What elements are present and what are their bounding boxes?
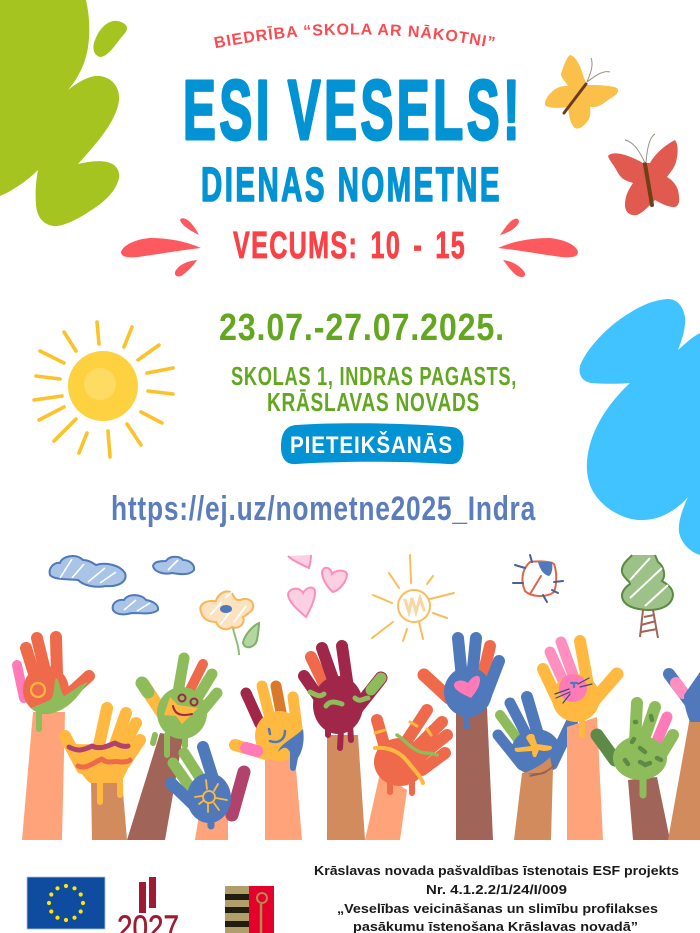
project description: „Veselības veicināšanas un slimību profilakses	[337, 901, 658, 916]
age label: VECUMS: 10 - 15	[233, 225, 466, 267]
doodle: child sun	[372, 555, 454, 641]
address	[231, 361, 517, 417]
address: KRĀSLAVAS NOVADS	[267, 387, 480, 417]
hand: yellow smiling	[235, 686, 304, 840]
project description: Krāslavas novada pašvaldības īstenotais ESF projekts	[314, 863, 679, 878]
hand: green with spots	[597, 703, 673, 840]
hand: orange with pink finger	[17, 637, 89, 840]
icon: yellow butterfly	[545, 55, 618, 129]
hand: blue with sun	[171, 747, 244, 840]
icon: watercolour sun	[34, 322, 173, 457]
registration button	[281, 423, 464, 464]
registration link: https://ej.uz/nometne2025_Indra	[111, 490, 536, 528]
hand: brown arm with green paint	[127, 658, 217, 840]
hand: yellow with wavy stripes	[65, 708, 140, 840]
dates: 23.07.-27.07.2025.	[219, 307, 505, 349]
doodle: hearts	[288, 555, 347, 617]
hand: blue at right edge	[668, 672, 700, 840]
EU stars	[47, 884, 85, 922]
doodle: ladybug	[513, 555, 563, 602]
green paint blob top left	[0, 0, 127, 226]
hand: maroon with green paint	[304, 646, 381, 840]
registration button: PIETEIKŠANĀS	[290, 431, 453, 459]
hand: yellow with bunny	[543, 641, 617, 840]
left splash decoration	[121, 218, 201, 276]
EU flag logo	[27, 877, 105, 929]
Latvia 2027 logo	[117, 877, 179, 933]
doodle: clouds	[50, 556, 194, 614]
hand: orange with stripes	[365, 710, 447, 840]
doodle: flower	[200, 591, 259, 655]
project description: Nr. 4.1.2.2/1/24/I/009	[426, 882, 567, 897]
organisation heading: BIEDRĪBA “SKOLA AR NĀKOTNI”	[214, 24, 495, 48]
hand: blue with heart	[424, 638, 499, 840]
hands illustration	[17, 637, 700, 840]
doodle: tree	[622, 555, 673, 638]
subtitle: DIENAS NOMETNE	[201, 159, 502, 212]
blue paint blob right	[580, 299, 700, 555]
icon: red butterfly	[608, 134, 679, 215]
address: SKOLAS 1, INDRAS PAGASTS,	[231, 361, 517, 391]
Krāslava coat of arms	[225, 886, 274, 933]
project description	[314, 863, 679, 933]
hand: blue with flower	[498, 697, 572, 840]
right splash decoration	[498, 219, 578, 277]
